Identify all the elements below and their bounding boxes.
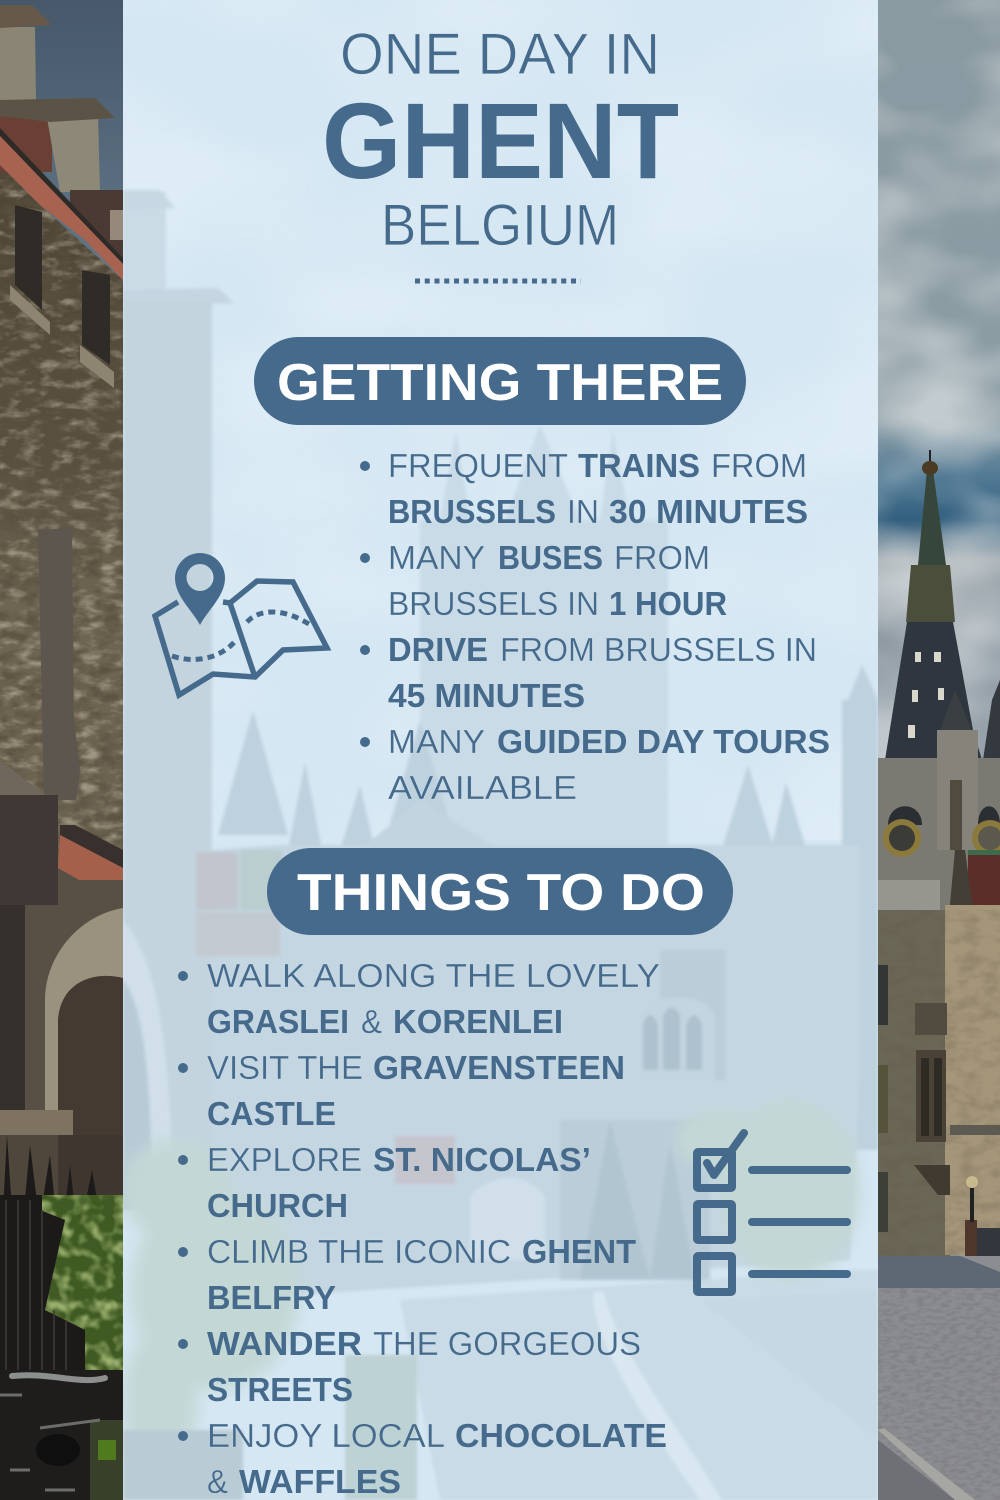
item: guided tours: AVAILABLE [388, 769, 577, 806]
item: streets: THE GORGEOUS [373, 1325, 641, 1362]
item: buses [388, 539, 727, 622]
bullet points [360, 461, 370, 747]
list: things to do [178, 957, 667, 1500]
item: castle: VISIT THE [207, 1049, 363, 1086]
icon: checklist [697, 1133, 847, 1292]
item: church: CHURCH [207, 1187, 348, 1224]
item: church: ST. NICOLAS’ [373, 1141, 591, 1178]
item: graslei: WALK ALONG THE LOVELY [207, 957, 660, 994]
heading: things to do: THINGS TO DO [297, 864, 705, 922]
ghost: church tower and spires [420, 425, 668, 860]
title line: ghent: GHENT [322, 80, 679, 201]
item: drive [388, 631, 817, 714]
ghost: road [400, 1270, 878, 1500]
item: graslei [207, 957, 660, 1040]
item: streets [207, 1325, 641, 1408]
heading: getting there: GETTING THERE [277, 354, 723, 412]
heading: things to do [267, 848, 733, 935]
item: streets: WANDER [207, 1325, 362, 1362]
item: belfry: CLIMB THE ICONIC [207, 1233, 511, 1270]
item: castle: GRAVENSTEEN [373, 1049, 625, 1086]
item: belfry: GHENT [522, 1233, 636, 1270]
title line: belgium: BELGIUM [381, 193, 619, 258]
ghost: lower church [212, 800, 860, 1300]
item: chocolate and waffles: WAFFLES [239, 1463, 401, 1500]
item: buses: BUSES [498, 539, 603, 576]
item: buses: 1 HOUR [609, 585, 727, 622]
ghost: left building [123, 190, 234, 1180]
item: trains [388, 447, 808, 530]
item: chocolate and waffles: & [207, 1463, 228, 1500]
ghost: turrets [218, 665, 878, 1150]
item: trains: FROM [711, 447, 807, 484]
item: castle: CASTLE [207, 1095, 336, 1132]
item: belfry: BELFRY [207, 1279, 336, 1316]
item: chocolate and waffles: ENJOY LOCAL [207, 1417, 445, 1454]
item: drive: FROM BRUSSELS IN [500, 631, 817, 668]
list: getting there [360, 447, 830, 806]
left photo strip: stone building [0, 0, 123, 1500]
item: trains: BRUSSELS [388, 493, 556, 530]
item: trains: 30 MINUTES [609, 493, 808, 530]
item: castle [207, 1049, 625, 1132]
item: graslei: KORENLEI [393, 1003, 563, 1040]
ghost: arch on the left [123, 920, 172, 1210]
item: guided tours: GUIDED DAY TOURS [497, 723, 830, 760]
ghost: trees [123, 1104, 864, 1431]
item: drive: DRIVE [388, 631, 488, 668]
item: graslei: & [361, 1003, 382, 1040]
title [322, 22, 679, 258]
title line: one day in: ONE DAY IN [340, 22, 660, 87]
item: trains: IN [567, 493, 599, 530]
item: chocolate and waffles: CHOCOLATE [455, 1417, 667, 1454]
item: guided tours: MANY [388, 723, 485, 760]
bullet points [178, 971, 188, 1441]
item: buses: MANY [388, 539, 485, 576]
ghost: green sign and bikes [123, 1355, 417, 1500]
item: church: EXPLORE [207, 1141, 362, 1178]
item: trains: TRAINS [578, 447, 700, 484]
panel: translucent background with ghosted church [120, 0, 878, 1500]
item: graslei: GRASLEI [207, 1003, 349, 1040]
item: belfry [207, 1233, 636, 1316]
item: drive: 45 MINUTES [388, 677, 585, 714]
icon: map with location pin [155, 553, 327, 695]
item: guided tours [388, 723, 830, 806]
item: buses: BRUSSELS IN [388, 585, 599, 622]
item: chocolate and waffles [207, 1417, 667, 1500]
item: streets: STREETS [207, 1371, 353, 1408]
right photo strip: belfry and cobbled square [878, 0, 1000, 1500]
ghost: hostel signs [196, 850, 455, 1184]
item: trains: FREQUENT [388, 447, 568, 484]
item: church [207, 1141, 591, 1224]
item: buses: FROM [614, 539, 710, 576]
heading: getting there [254, 337, 746, 425]
